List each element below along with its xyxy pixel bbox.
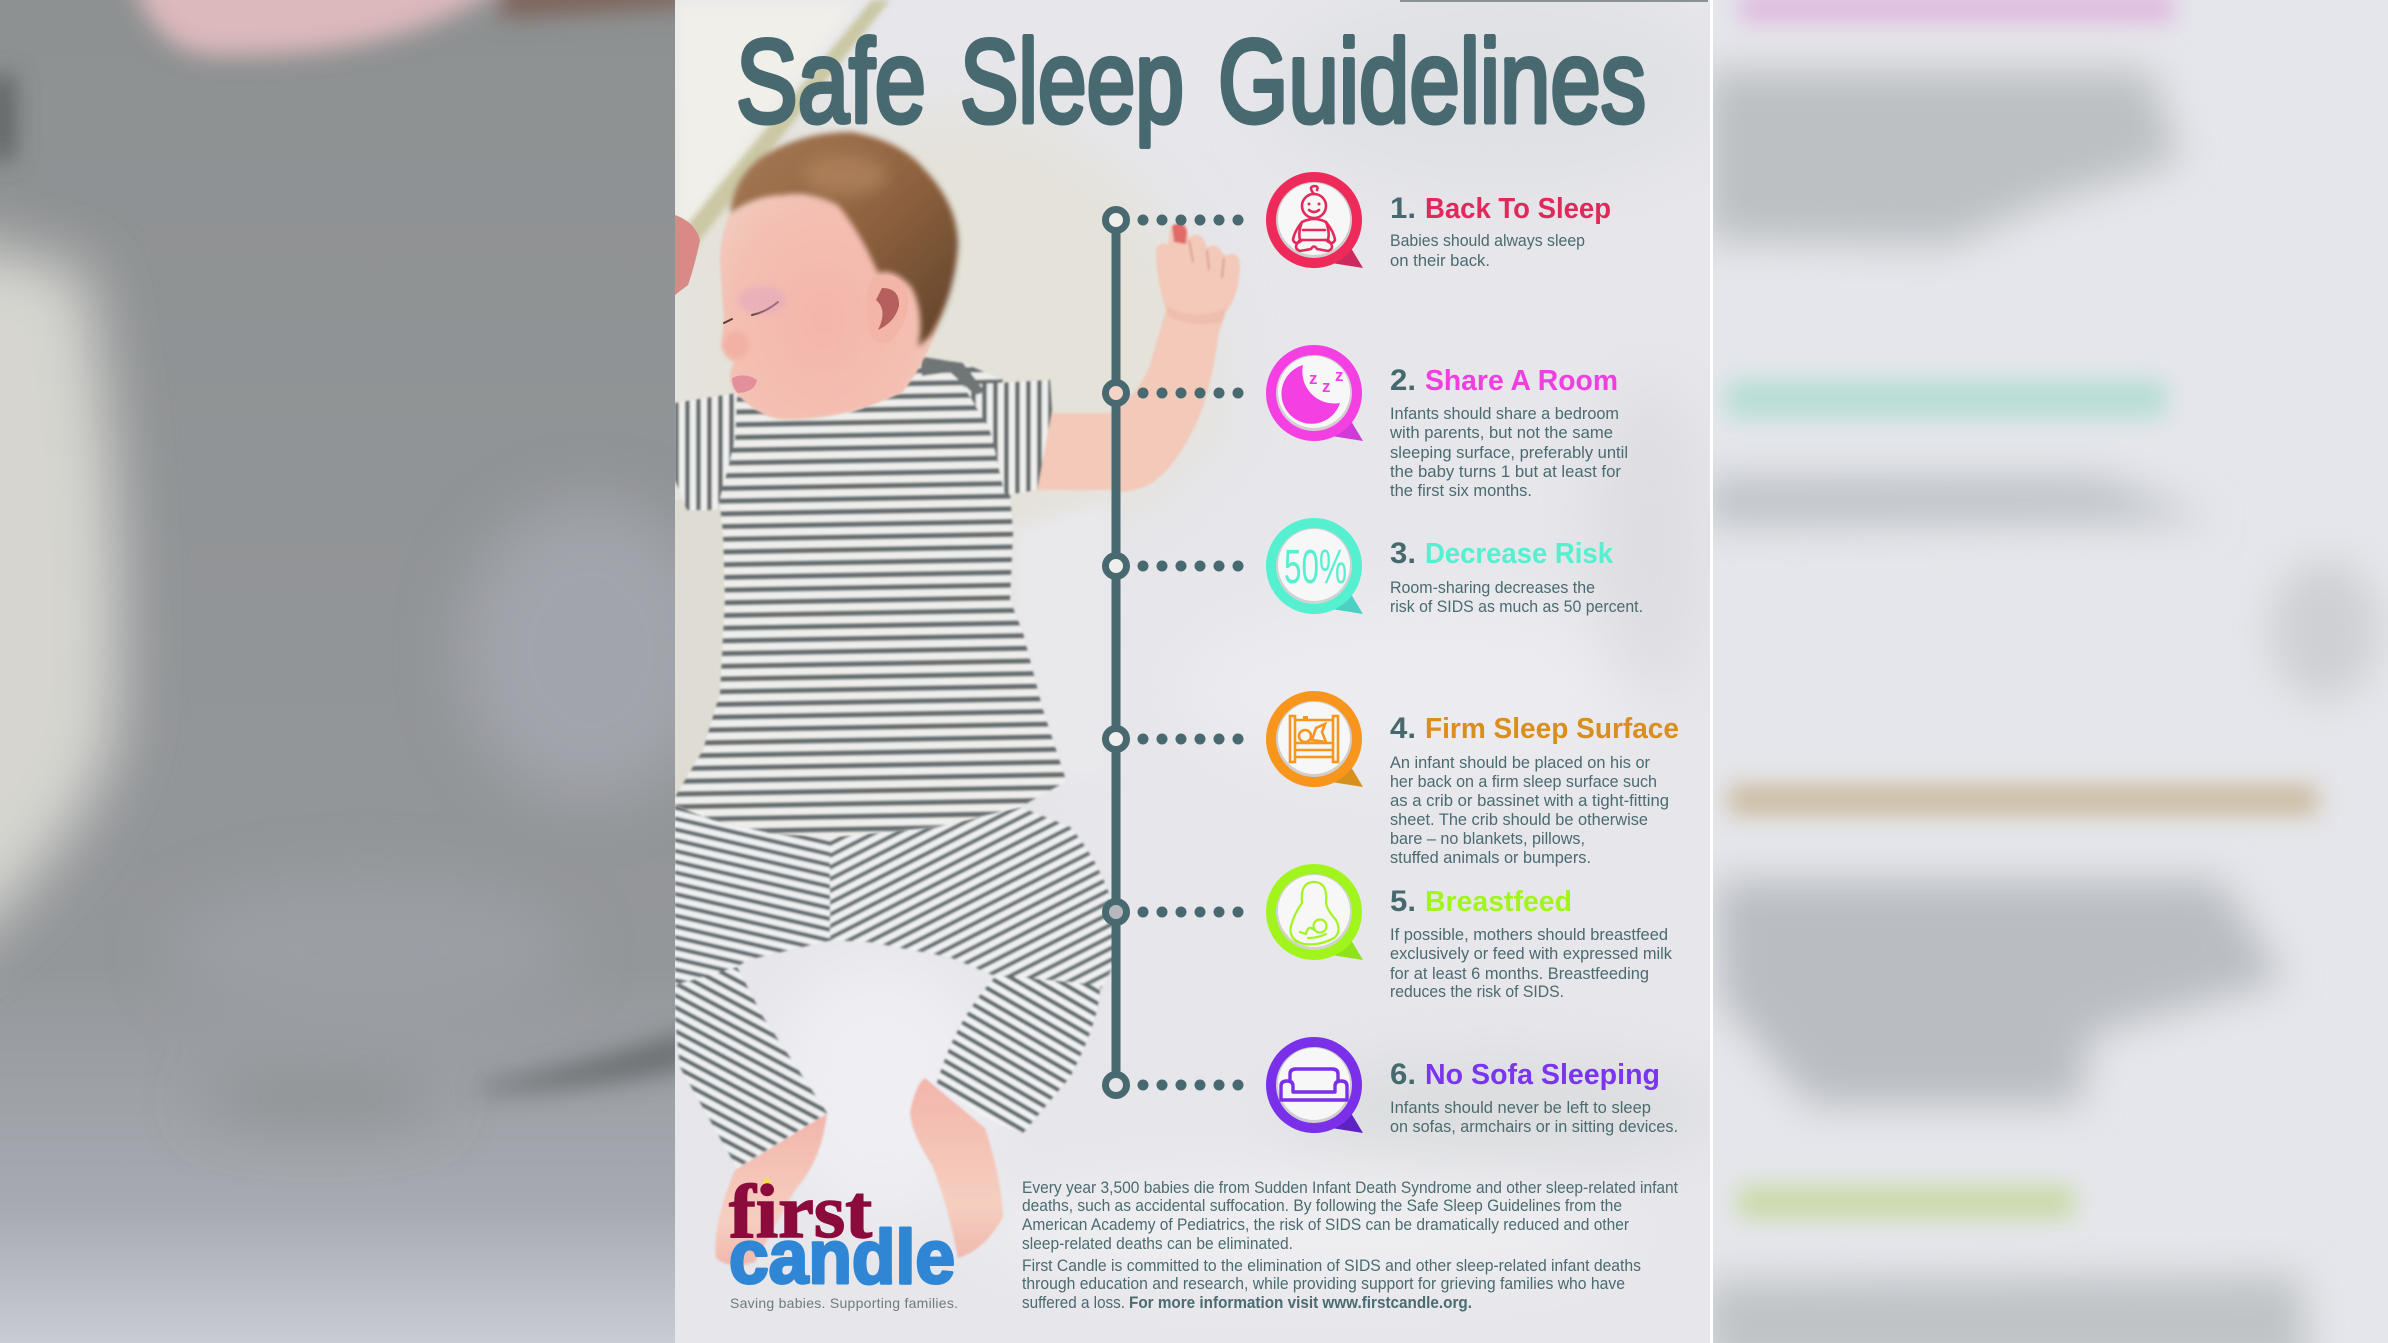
item 4: Firm Sleep Surface: stuffed animals or bumpers. <box>1390 848 1591 867</box>
logo: First Candle <box>729 1170 958 1311</box>
item 1: Back To Sleep <box>1390 192 1611 270</box>
item 4: Firm Sleep Surface: bare – no blankets, pillows, <box>1390 829 1585 848</box>
item 6: No Sofa Sleeping: 6. <box>1390 1058 1416 1091</box>
timeline node 5 <box>1106 902 1244 922</box>
timeline node 4 <box>1106 728 1244 750</box>
timeline node 2 <box>1106 382 1244 404</box>
item 4: Firm Sleep Surface: 4. <box>1390 712 1416 745</box>
item 2: Share A Room: the first six months. <box>1390 481 1532 500</box>
photo: striped shirt <box>675 357 1065 837</box>
footer text: For more information visit www.firstcandle.org. <box>1129 1293 1472 1312</box>
item 5: Breastfeed: for at least 6 months. Breastfeeding <box>1390 964 1649 983</box>
item 4: Firm Sleep Surface: An infant should be placed on his or <box>1390 753 1650 772</box>
item 3: Decrease Risk <box>1390 537 1643 616</box>
item 3: Decrease Risk: risk of SIDS as much as 50 percent. <box>1390 597 1643 616</box>
item 5: Breastfeed: 5. <box>1390 885 1416 918</box>
photo: baby head <box>720 132 958 419</box>
item 1: Back To Sleep: Back To Sleep <box>1425 193 1611 225</box>
photo: far hand <box>675 215 700 295</box>
item 5: Breastfeed: exclusively or feed with expressed milk <box>1390 944 1672 963</box>
item 2: Share A Room: the baby turns 1 but at least for <box>1390 462 1621 481</box>
item 2: Share A Room: Share A Room <box>1425 365 1618 397</box>
timeline <box>1106 210 1244 1096</box>
footer text: through education and research, while providing support for grieving families who have <box>1022 1274 1625 1293</box>
footer text <box>1022 1178 1678 1312</box>
item 6: No Sofa Sleeping: No Sofa Sleeping <box>1425 1059 1660 1091</box>
icon: crib in orange bubble <box>1266 691 1363 787</box>
lips <box>732 375 757 393</box>
icon: breastfeeding mother in green bubble <box>1266 864 1363 960</box>
icon: sofa in purple bubble <box>1266 1037 1363 1133</box>
poster panel <box>660 0 1730 1343</box>
footer text: Every year 3,500 babies die from Sudden Infant Death Syndrome and other sleep-related infant <box>1022 1178 1678 1197</box>
blurred background: right <box>1705 0 2388 1343</box>
item 4: Firm Sleep Surface <box>1390 712 1679 867</box>
footer text: suffered a loss. <box>1022 1293 1125 1312</box>
item 1: Back To Sleep: 1. <box>1390 192 1416 225</box>
item 3: Decrease Risk: Room-sharing decreases the <box>1390 578 1595 597</box>
title <box>736 16 1646 148</box>
icon: 50% in teal bubble <box>1266 518 1363 614</box>
icon: 50% in teal bubble: 50% <box>1284 541 1347 594</box>
item 2: Share A Room: sleeping surface, preferably until <box>1390 443 1628 462</box>
footer text: First Candle is committed to the elimination of SIDS and other sleep-related infant deaths <box>1022 1256 1641 1275</box>
timeline node 6 <box>1106 1074 1244 1096</box>
logo: First Candle: Saving babies. Supporting families. <box>730 1295 958 1311</box>
nose <box>723 331 749 359</box>
item 2: Share A Room: 2. <box>1390 364 1416 397</box>
item 5: Breastfeed <box>1390 885 1672 1001</box>
ear <box>882 276 908 338</box>
item 5: Breastfeed: Breastfeed <box>1425 886 1572 918</box>
item 4: Firm Sleep Surface: as a crib or bassinet with a tight-fitting <box>1390 791 1669 810</box>
title: Guidelines <box>1218 16 1646 148</box>
blurred background: left <box>0 0 720 1343</box>
item 6: No Sofa Sleeping <box>1390 1058 1678 1136</box>
photo: baby feet <box>715 1078 1003 1265</box>
item 2: Share A Room: with parents, but not the same <box>1389 423 1613 442</box>
photo: striped trousers <box>675 805 1118 1168</box>
timeline node 3 <box>1106 556 1244 576</box>
item 6: No Sofa Sleeping: on sofas, armchairs or in sitting devices. <box>1390 1117 1678 1136</box>
item 5: Breastfeed: reduces the risk of SIDS. <box>1390 982 1564 1001</box>
footer text: deaths, such as accidental suffocation. By following the Safe Sleep Guidelines from the <box>1022 1196 1622 1215</box>
closed eye <box>724 302 778 323</box>
item 6: No Sofa Sleeping: Infants should never be left to sleep <box>1390 1098 1651 1117</box>
item 3: Decrease Risk: 3. <box>1390 537 1416 570</box>
icon: moon in magenta bubble: z <box>1322 377 1330 396</box>
logo: First Candle: first <box>729 1170 872 1254</box>
icon: moon in magenta bubble: z <box>1309 369 1318 388</box>
photo: sheet <box>675 0 1708 1144</box>
icon: baby in red bubble <box>1266 172 1363 268</box>
photo: baby arm and hand <box>1030 222 1240 491</box>
item 5: Breastfeed: If possible, mothers should breastfeed <box>1390 925 1668 944</box>
icon: moon in magenta bubble: z <box>1335 366 1344 385</box>
title: Safe <box>736 16 926 148</box>
white gaps beside the poster <box>1710 0 1713 1343</box>
icon: moon in magenta bubble <box>1266 345 1363 441</box>
footer text: American Academy of Pediatrics, the risk of SIDS can be dramatically reduced and other <box>1022 1215 1629 1234</box>
item 3: Decrease Risk: Decrease Risk <box>1425 538 1614 570</box>
hair <box>730 132 958 347</box>
item 1: Back To Sleep: Babies should always sleep <box>1390 231 1585 250</box>
item 1: Back To Sleep: on their back. <box>1390 251 1490 270</box>
footer text: sleep-related deaths can be eliminated. <box>1022 1234 1293 1253</box>
item 2: Share A Room <box>1389 364 1628 500</box>
photo: crib rail <box>675 0 890 260</box>
logo: First Candle: candle <box>729 1215 955 1300</box>
timeline node 1 <box>1106 210 1244 230</box>
item 4: Firm Sleep Surface: sheet. The crib should be otherwise <box>1390 810 1648 829</box>
title: Sleep <box>960 16 1184 148</box>
item 2: Share A Room: Infants should share a bedroom <box>1390 404 1619 423</box>
item 4: Firm Sleep Surface: her back on a firm sleep surface such <box>1390 772 1657 791</box>
item 4: Firm Sleep Surface: Firm Sleep Surface <box>1425 713 1679 745</box>
